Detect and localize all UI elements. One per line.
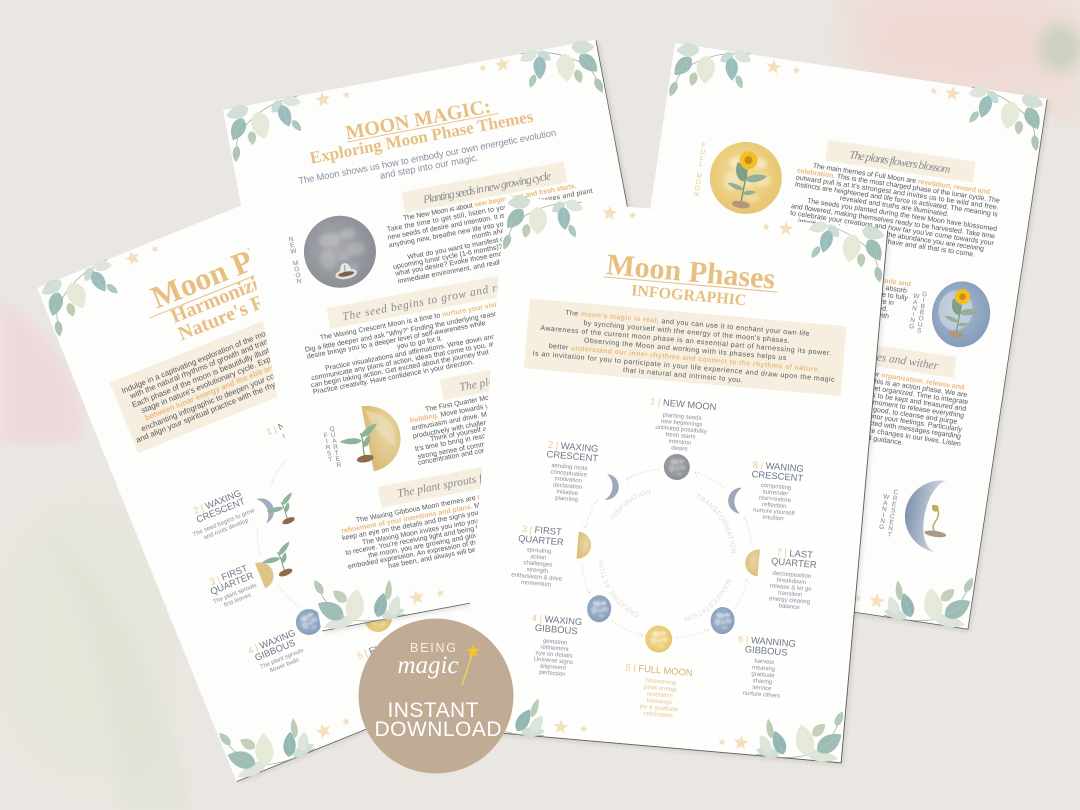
phase 4 label: The plant sprouts	[259, 648, 305, 671]
title: MOON MAGIC:	[344, 95, 493, 144]
first quarter illustration	[334, 400, 406, 477]
waning crescent illustration	[900, 476, 954, 553]
label: full moon: FULL MOON	[692, 142, 708, 198]
phase 6: wanning gibbous: meaning	[752, 665, 775, 673]
phase 8: waning crescent: reflection	[762, 502, 787, 510]
heading: plant sprouts flower buds	[378, 447, 593, 507]
first quarter text: It's time to bring in resources and a	[414, 426, 523, 453]
phase 5: full moon: blossoming	[646, 678, 676, 687]
last quarter text	[828, 366, 971, 456]
full moon text: Be thankful for all that you have and all that is to come.	[804, 226, 975, 259]
phase 3: first quarter: action	[530, 554, 547, 562]
full moon text: to celebrate your creations and how far you've come towards your	[790, 210, 995, 247]
intro box: better understand our inner rhythms and connect to the rhythms of nature.	[549, 343, 820, 374]
phase 4: waxing gibbous: Universe signs	[534, 657, 573, 666]
cycle arrows	[573, 463, 759, 647]
waxing gibbous text: to receive. You're receiving light and being filled by	[345, 521, 500, 557]
intro box: Awareness of the current moon phase is an essential part of harnessing its power.	[540, 325, 832, 357]
full moon illustration	[705, 137, 787, 219]
phase 6: wanning gibbous: gratitude	[751, 671, 776, 680]
phase 4 label	[246, 626, 307, 679]
icon: magic wand	[462, 644, 480, 685]
stars bottom	[408, 585, 446, 605]
phase 3: first quarter: 3 | FIRST	[521, 523, 562, 537]
badge: being magic instant download: INSTANT	[388, 699, 479, 722]
heading: leaves and wither	[806, 335, 957, 378]
waxing crescent text: you to go for it.	[396, 335, 443, 351]
phase 6: wanning gibbous: sharing	[752, 678, 772, 686]
title: Moon Phases	[605, 248, 777, 296]
full moon	[360, 600, 396, 636]
first quarter text: building. Move towards your goals with	[409, 395, 532, 425]
waxing crescent text: Practice visualizations and affirmations. Write down and	[325, 333, 496, 372]
phase 3: first quarter: challenges	[523, 560, 552, 569]
phase 1: new moon: fresh starts	[665, 432, 696, 441]
phase 1 label: Planting seeds	[282, 420, 321, 440]
heading: leaves and wither: The plants leaves and wither	[806, 341, 939, 372]
last quarter text: connected with messages regarding	[850, 417, 962, 441]
waxing crescent text: communicate any plans of action, ideas that come to you, and	[311, 340, 501, 382]
phase 2: waxing crescent	[543, 439, 623, 507]
phase 8: waning crescent	[727, 457, 805, 524]
waxing crescent moon	[256, 494, 278, 523]
phase 1: new moon	[644, 395, 717, 483]
last quarter text: get organized. Time to integrate	[870, 385, 969, 406]
label: new moon: NEW MOON	[286, 236, 303, 285]
last quarter text: to make changes in our lives. Listen	[850, 425, 961, 448]
phase 2: waxing crescent: sending roots	[551, 463, 588, 472]
phase circle theme labels: TRANSFORMATION	[696, 494, 736, 554]
phase 1: new moon: 1 | NEW MOON	[650, 395, 717, 412]
gratitude text fragment: with	[875, 312, 889, 321]
intro box: between lunar energy and the ebb and flow of nature. Use this	[143, 328, 361, 423]
phase 7: last quarter: transition	[778, 590, 803, 599]
waxing gibbous text: embodied expression. An expression of the light	[347, 536, 495, 571]
gratitude text fragment	[861, 275, 911, 323]
heading: plant sprouts first leaves: The plant sprouts first leaves	[459, 357, 592, 394]
new moon text: month ahead.	[471, 226, 515, 241]
phase 3: first quarter: enthusiasm & drive	[511, 572, 563, 583]
label: first quarter: QUARTER	[328, 425, 343, 469]
badge: being magic instant download: DOWNLOAD	[374, 718, 502, 741]
new moon text: upcoming lunar cycle (1-6 months)? What do you	[393, 236, 544, 271]
title	[137, 212, 348, 353]
phase 1 label	[264, 402, 337, 453]
full moon text: The seeds you planted during the New Moon have blossomed	[807, 198, 998, 233]
leaves top left	[665, 39, 754, 109]
phase 7: last quarter	[741, 543, 818, 612]
phase 8: waning crescent: nurture yourself	[753, 507, 795, 517]
badge: being magic instant download: BEING	[410, 641, 456, 655]
waning gibbous illustration	[927, 277, 995, 351]
last quarter text: what's to be kept and treasured and	[855, 390, 967, 413]
phase 3: first quarter	[510, 522, 593, 592]
phase 6: wanning gibbous: service	[752, 685, 772, 692]
intro box: by synching yourself with the energy of the moon's phases.	[583, 320, 790, 345]
phase 2: waxing crescent: initiative	[556, 489, 579, 497]
first quarter moon	[255, 558, 278, 588]
phase 8: waning crescent: CRESCENT	[751, 468, 804, 484]
first quarter text: enthusiasm and drive. Move forward and work	[411, 399, 554, 432]
intro box: and align your spiritual practice with the rhythms of the natural world.	[135, 347, 358, 445]
phase 3 label: QUARTER	[208, 569, 255, 597]
phase 3 label	[204, 561, 261, 612]
gratitude text fragment: take in	[873, 297, 894, 307]
badge: being magic instant download: magic	[397, 652, 459, 679]
phase 5: full moon: revelation	[647, 691, 673, 700]
intro box	[110, 263, 435, 453]
last quarter text: This is an action phase. We are	[870, 378, 968, 399]
phase 6: wanning gibbous: harvest	[754, 658, 775, 666]
phase circle theme labels	[598, 489, 736, 622]
heading: seed begins to grow	[327, 262, 576, 329]
full moon text: The main themes of Full Moon are revelation, reward and	[812, 163, 990, 196]
label: waning crescent: WANING	[877, 493, 890, 531]
phase 7: last quarter: breakdown	[776, 578, 806, 586]
full moon text: intentions and give thanks for the abundance you are receiving	[797, 218, 984, 253]
phase 7: last quarter: decomposition	[772, 571, 811, 580]
heading: planting seeds	[401, 162, 567, 213]
label: waning gibbous: WANING	[907, 293, 920, 330]
phase 4: waxing gibbous: 4 | WAXING	[531, 612, 583, 627]
phase 2 label: and roots develop	[203, 518, 250, 541]
sheet: moon magic (back centre)	[219, 35, 697, 634]
first quarter text: concentration and consistency.	[417, 442, 513, 467]
sheet: moon phases infographic (front)	[470, 195, 890, 766]
waxing crescent text: Dig a little deeper and ask "Why?" Finding the underlying reason you	[304, 307, 515, 354]
phase 6: wanning gibbous: nurture others	[742, 691, 780, 700]
full moon text: outward pull is at it's strongest and invites us to be wild and free.	[795, 174, 999, 212]
phase 1: new moon: desire	[671, 445, 688, 453]
leaves top right	[960, 83, 1049, 153]
intro box: with the natural rhythms of growth and transformation found in nature.	[128, 302, 355, 401]
phase circle theme labels: MANIFESTATION	[684, 578, 731, 622]
phase 4: waxing gibbous	[527, 590, 612, 682]
last quarter text: honor your feelings. Particularly	[864, 412, 963, 434]
full moon text: and flowered, making themselves ready to be harvested. Take time	[791, 203, 995, 240]
title: Harmonizing with	[168, 249, 321, 328]
gratitude text fragment: gratitude and	[866, 275, 911, 288]
intro box: that is natural and intrinsic to you.	[623, 367, 743, 384]
leaves bottom	[213, 700, 318, 785]
phase 4: waxing gibbous: GIBBOUS	[534, 622, 578, 636]
label: waning crescent	[876, 487, 900, 538]
phase 5: full moon: celebration	[643, 711, 673, 720]
subtitle: and step into our magic.	[379, 153, 479, 182]
phase 7: last quarter: QUARTER	[771, 555, 817, 570]
phase 2 label: The seed begins to grow	[192, 508, 256, 538]
new moon text: anything new, breathe new life into your dreams	[388, 215, 536, 250]
phase 1: new moon: unlimited possibility	[655, 425, 707, 435]
title: INFOGRAPHIC	[630, 282, 747, 309]
phase 6: wanning gibbous: GIBBOUS	[744, 643, 788, 658]
new moon text: Take the time to get still, listen to your heart's desires and plant	[387, 188, 593, 234]
phase 3 label: first leaves	[223, 592, 252, 609]
badge: being magic instant download	[358, 618, 514, 774]
phase 6: wanning gibbous: 6 | WANNING	[738, 633, 796, 649]
phase 5: full moon: joy & gratitude	[638, 704, 679, 713]
intro box: enchanting infographic to deepen your connection to the cosmos	[140, 341, 350, 433]
phase 1: new moon: planting seeds	[663, 413, 702, 422]
phase 3: first quarter: strength	[526, 567, 548, 575]
full moon text: celebration. This is the most charged phase of the lunar cycle. The	[796, 167, 1000, 205]
phase 6: wanning gibbous	[704, 606, 798, 701]
title: Moon Phases	[146, 216, 324, 315]
sprout two	[257, 539, 302, 582]
stars bottom	[553, 719, 749, 750]
intro box: Indulge in a captivating exploration of the moon phases, and align yourself	[120, 291, 362, 395]
heading: plants flowers blossom: The plants flowers blossom	[848, 149, 951, 176]
phase 7: last quarter: balance	[778, 603, 800, 611]
last quarter text: no longer good, to cleanse and purge	[842, 402, 958, 426]
first quarter text	[408, 380, 578, 467]
intro box: Observing the Moon and working with its phases helps us	[584, 337, 787, 362]
phase 8: waning crescent: 8 | WANING	[752, 459, 804, 474]
phase 1 label: in new soil	[290, 430, 319, 446]
phase 4: waxing gibbous: perfection	[539, 670, 566, 678]
full moon text: Instincts are heightened and life force is activated. The meaning is	[794, 181, 999, 219]
new moon text: The New Moon is about new beginnings and fresh starts.	[403, 183, 577, 222]
leaves top right	[803, 218, 889, 284]
leaves top left	[500, 192, 586, 257]
waxing gibbous text: refinement of your intentions and plans. Move forward and	[341, 493, 530, 535]
phase 2: waxing crescent: planning	[555, 496, 578, 503]
new moon text: new seeds of desire and intention. It is a time to start	[387, 204, 549, 242]
last quarter text: moment to release everything	[872, 399, 965, 420]
phase 4 label: GIBBOUS	[253, 637, 297, 663]
phase circle theme labels: INSPIRATION	[610, 489, 651, 520]
new moon illustration	[298, 210, 382, 294]
phase 3: first quarter: QUARTER	[518, 532, 564, 547]
last quarter text: and guidance.	[859, 434, 904, 447]
phase 2: waxing crescent: conceptualize	[550, 469, 588, 479]
full moon text	[787, 160, 1003, 261]
phase 2: waxing crescent: declaration	[553, 482, 583, 491]
phase 7: last quarter: energy clearing	[769, 596, 810, 606]
heading: seed begins to grow: The seed begins to grow and roots develop	[341, 270, 562, 323]
phase 3: first quarter: momentum	[521, 580, 551, 588]
phase 1: new moon: intention	[668, 439, 692, 447]
waxing gibbous text: has been, and always will be.	[388, 546, 479, 570]
phase 7: last quarter: release & let go	[770, 583, 812, 593]
title: Nature's Rhythms	[175, 267, 328, 345]
first quarter text: strong sense of commitment,	[417, 437, 507, 461]
gratitude text fragment: time to fully	[872, 290, 909, 302]
phase 2 label: 2 | WAXING	[192, 487, 243, 516]
waxing crescent text: desire brings you to a deeper level of self-awareness while	[306, 320, 486, 361]
phase 4: waxing gibbous: gestation	[543, 638, 567, 647]
phase 5: full moon	[621, 623, 696, 721]
leaves bottom left	[455, 677, 550, 739]
leaves bottom right	[754, 703, 849, 766]
first quarter text: The First Quarter Moon is a time for action and	[425, 380, 569, 414]
waxing gibbous moon	[292, 605, 326, 639]
phase 5 label: 5 | FULL MOON	[355, 626, 422, 661]
gratitude text fragment: absorb	[885, 285, 907, 295]
phase 8: waning crescent: intuition	[763, 515, 784, 522]
phase 2 label: CRESCENT	[195, 495, 247, 525]
sheet: harmonizing with nature (back left)	[32, 139, 597, 785]
sprout one	[262, 490, 303, 530]
label: waning gibbous: GIBBOUS	[915, 291, 929, 334]
leaves top	[34, 254, 131, 339]
stars top	[765, 58, 961, 101]
waxing gibbous text: The Waxing Gibbous Moon themes are anticipation,	[356, 487, 519, 524]
new moon text: what you desire? Evoke those emotions within	[394, 244, 537, 278]
phase 4: waxing gibbous: eye on details	[535, 650, 573, 660]
leaves bottom left	[308, 563, 407, 634]
subtitle: The Moon shows us how to embody our own energetic evolution	[298, 128, 557, 187]
label: waning gibbous	[906, 289, 929, 334]
stars top	[314, 56, 511, 107]
full moon text: revealed and truths are illuminated.	[839, 195, 949, 218]
phase 7: last quarter: 7 | LAST	[776, 546, 814, 560]
waxing gibbous text: the moon, you are growing and glowing.	[368, 530, 491, 560]
title: Exploring Moon Phase Themes	[308, 107, 535, 168]
last quarter text: is the time for organization, release and	[837, 366, 965, 391]
stars top	[123, 241, 161, 267]
waxing gibbous text: The Waxing Moon invites you into your power	[362, 513, 502, 547]
gratitude text fragment: shed.	[870, 304, 888, 313]
new moon text: What do you want to manifest over the	[407, 232, 526, 261]
phase 2: waxing crescent: CRESCENT	[546, 448, 599, 464]
phase 8: waning crescent: surrender	[762, 489, 788, 498]
intro box: Is an invitation for you to participate in your life experience and draw upon the magic	[532, 350, 835, 384]
phase 5: full moon: blessings	[647, 698, 672, 706]
intro box	[524, 299, 847, 396]
phase 3 label: The plant sprouts	[212, 583, 258, 606]
phase 4 label: 4 | WAXING	[246, 627, 297, 656]
stars top	[602, 205, 794, 236]
intro box: stage in nature's evolutionary cycle. Explore the harmony found	[140, 325, 346, 415]
intro box: The moon's magic is real, and you can use it to enchant your own life	[565, 310, 810, 338]
waxing crescent text: The Waxing Crescent Moon is a time to nurture your vision.	[319, 300, 507, 342]
new moon text: immediate environment, and really feel it.	[397, 255, 524, 285]
cycle arrows	[232, 460, 340, 614]
stars bottom	[853, 590, 885, 608]
heading: plants flowers blossom	[825, 140, 976, 183]
first quarter text: Think of yourself as a warrior.	[430, 419, 521, 443]
leaves top left	[221, 91, 311, 164]
phase 1 label: 1 | NEW MOON	[264, 402, 330, 437]
sheet: full moon themes (back right)	[594, 39, 1051, 632]
phase 4: waxing gibbous: alignment	[540, 664, 566, 672]
label: first quarter	[321, 425, 343, 470]
heading: planting seeds: Planting seeds in new growing cycle	[421, 170, 552, 206]
heading: plant sprouts flower buds: The plant sprouts flower buds	[396, 463, 534, 500]
intro box: Each phase of the moon is beautifully illustrated, reflecting a new and	[131, 312, 356, 410]
phase 2: waxing crescent: 2 | WAXING	[548, 439, 599, 454]
waxing crescent text	[302, 299, 523, 396]
stars bottom	[314, 713, 352, 740]
phase 2: waxing crescent: motivation	[554, 476, 582, 485]
phase circle theme labels: CREATIVE ACTION	[598, 560, 639, 617]
phase 5: full moon: peak energy	[644, 685, 677, 693]
waxing crescent text: Practice creativity. Have confidence in your direction.	[312, 359, 475, 396]
phase 1: new moon: new beginnings	[661, 419, 703, 428]
phase 3: first quarter: sprouting	[526, 547, 552, 555]
phase 8: waning crescent: rest+restore	[759, 495, 792, 504]
label: first quarter: FIRST	[322, 432, 334, 463]
phase 5: full moon: 5 | FULL MOON	[625, 661, 693, 678]
heading: plant sprouts first leaves	[440, 349, 606, 400]
leaves top right	[516, 35, 607, 108]
phase 8: waning crescent: composting	[760, 483, 791, 492]
phase 4 label: flower buds	[269, 657, 300, 674]
phase 3 label: 3 | FIRST	[208, 562, 249, 587]
waxing gibbous text: keep an eye on the details and the signs you are seeing.	[342, 503, 515, 542]
label: waning crescent: CRESCENT	[886, 489, 900, 538]
phase 2 label	[183, 485, 259, 545]
first quarter text: productively with challenges that appear.	[412, 410, 538, 440]
phase 4: waxing gibbous: refinement	[540, 645, 569, 653]
leaves bottom right	[882, 564, 979, 632]
new moon text	[384, 180, 603, 286]
waxing gibbous text	[339, 485, 538, 578]
waxing crescent text: can begin taking action. Get excited about the journey that	[311, 349, 489, 389]
